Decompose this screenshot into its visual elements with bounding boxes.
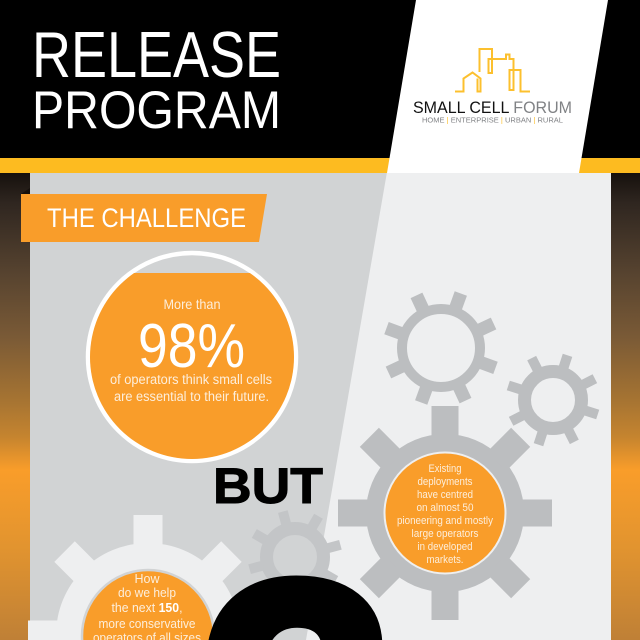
gear text: have centred — [417, 489, 473, 501]
gear panel: next 150 operators — [28, 515, 268, 640]
gear text: How — [134, 571, 160, 586]
gear text: the next 150, — [112, 600, 182, 615]
gear text — [397, 463, 493, 566]
orange circle — [82, 570, 214, 640]
header band — [0, 0, 640, 173]
callout: 98% statistic: More than — [164, 296, 220, 312]
title — [32, 18, 281, 140]
icon: large gear — [338, 406, 552, 620]
gear text: do we help — [118, 585, 176, 600]
icon: city skyline — [455, 49, 530, 92]
callout: 98% statistic: 98% — [138, 312, 245, 381]
icon: small right gear — [507, 354, 599, 446]
icon: small centre gear — [248, 510, 342, 604]
title: RELEASE — [32, 18, 281, 91]
content panel — [30, 172, 611, 640]
icon: upper gear — [384, 291, 498, 405]
gear text — [93, 571, 201, 640]
icon: light gear — [28, 515, 268, 640]
heading: the challenge — [21, 188, 267, 242]
gear text: in developed — [418, 541, 472, 553]
logo tagline: HOME | ENTERPRISE | URBAN | RURAL — [422, 118, 563, 124]
gear text: markets. — [426, 554, 464, 566]
callout: 98% statistic: of operators think small cells — [110, 372, 272, 387]
callout: 98% statistic: are essential to their future. — [114, 389, 269, 404]
gear text: deployments — [418, 476, 473, 488]
gear text: large operators — [412, 528, 479, 540]
gear text: more conservative — [98, 616, 196, 631]
logo wordmark: SMALL CELL FORUM — [413, 98, 572, 117]
heading: the challenge: THE CHALLENGE — [47, 203, 246, 233]
gear text: on almost 50 — [416, 502, 474, 514]
heading: BUT: BUT — [213, 458, 323, 514]
logo: Small Cell Forum — [413, 49, 572, 124]
background side bands — [0, 172, 640, 640]
callout: 98% statistic — [88, 253, 296, 461]
gear text: pioneering and mostly — [397, 515, 493, 527]
gear text: Existing — [428, 463, 462, 475]
orange circle — [384, 452, 506, 574]
gear panel: existing deployments — [338, 406, 552, 620]
title: PROGRAM — [32, 81, 281, 140]
